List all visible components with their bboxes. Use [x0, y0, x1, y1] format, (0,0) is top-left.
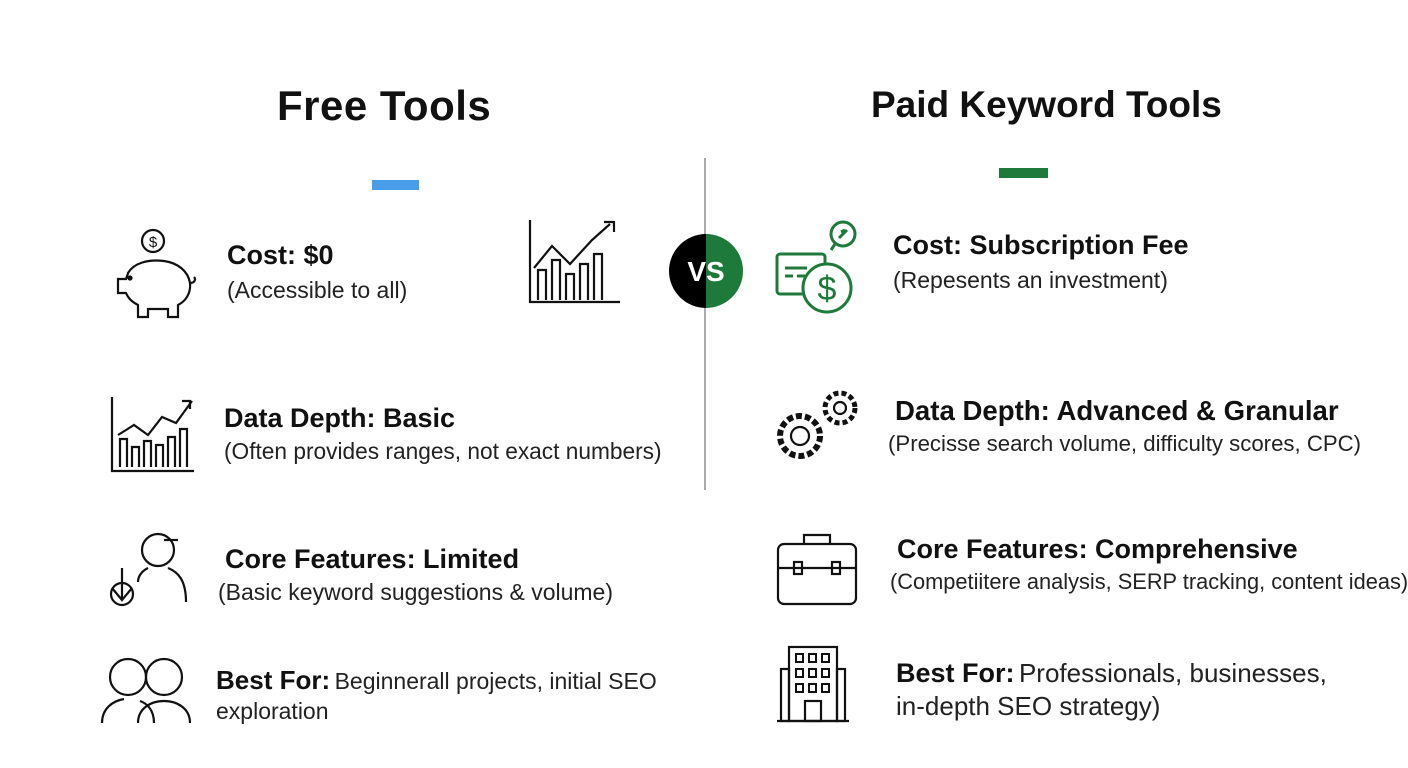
block: core features limited: Core Features: Limited: [225, 544, 519, 574]
icon: growth chart: [528, 220, 620, 304]
block: cost free: [227, 240, 407, 303]
block: core features comprehensive: [890, 534, 1408, 594]
block: data depth advanced: (Precisse search volume, difficulty scores, CPC): [888, 431, 1361, 456]
block: data depth basic: Data Depth: Basic: [224, 403, 455, 433]
icon: piggy bank: [116, 228, 196, 318]
icon: piggy bank: $: [149, 234, 158, 251]
title: paid tools: Paid Keyword Tools: [871, 84, 1222, 125]
block: data depth basic: (Often provides ranges, not exact numbers): [224, 438, 662, 464]
block: data depth advanced: Data Depth: Advanced & Granular: [895, 395, 1339, 426]
icon: money card: [776, 220, 856, 314]
block: cost paid: [893, 230, 1189, 293]
vs badge: [669, 234, 743, 308]
icon: two people: [100, 658, 192, 723]
block: core features limited: [218, 544, 613, 605]
block: data depth basic: [224, 403, 662, 464]
icon: person with arrow: [110, 532, 188, 606]
divider: [704, 158, 706, 490]
block: best for free: Best For: Beginnerall projects, initial SEO: [216, 665, 657, 695]
icon: bar chart: [110, 397, 194, 472]
block: core features limited: (Basic keyword suggestions & volume): [218, 579, 613, 605]
block: cost free: (Accessible to all): [227, 277, 407, 303]
block: cost paid: Cost: Subscription Fee: [893, 230, 1189, 260]
block: best for paid: [896, 658, 1327, 721]
block: core features comprehensive: (Competiitere analysis, SERP tracking, content ideas): [890, 569, 1408, 594]
block: data depth advanced: [888, 395, 1361, 456]
accent bar blue: [372, 180, 419, 190]
block: core features comprehensive: Core Features: Comprehensive: [897, 534, 1298, 564]
block: cost free: Cost: $0: [227, 240, 334, 270]
icon: briefcase: [776, 534, 858, 606]
icon: gears: [777, 390, 858, 459]
block: best for paid: in-depth SEO strategy): [896, 691, 1160, 721]
icon: office building: [777, 646, 849, 722]
block: cost paid: (Repesents an investment): [893, 267, 1168, 293]
icon: money card: $: [818, 270, 837, 308]
title: free tools: Free Tools: [277, 82, 491, 129]
vs badge: VS: [687, 256, 725, 287]
block: best for paid: Best For: Professionals, businesses,: [896, 658, 1327, 688]
block: best for free: [216, 665, 657, 724]
accent bar green: [999, 168, 1048, 178]
block: best for free: exploration: [216, 698, 329, 724]
